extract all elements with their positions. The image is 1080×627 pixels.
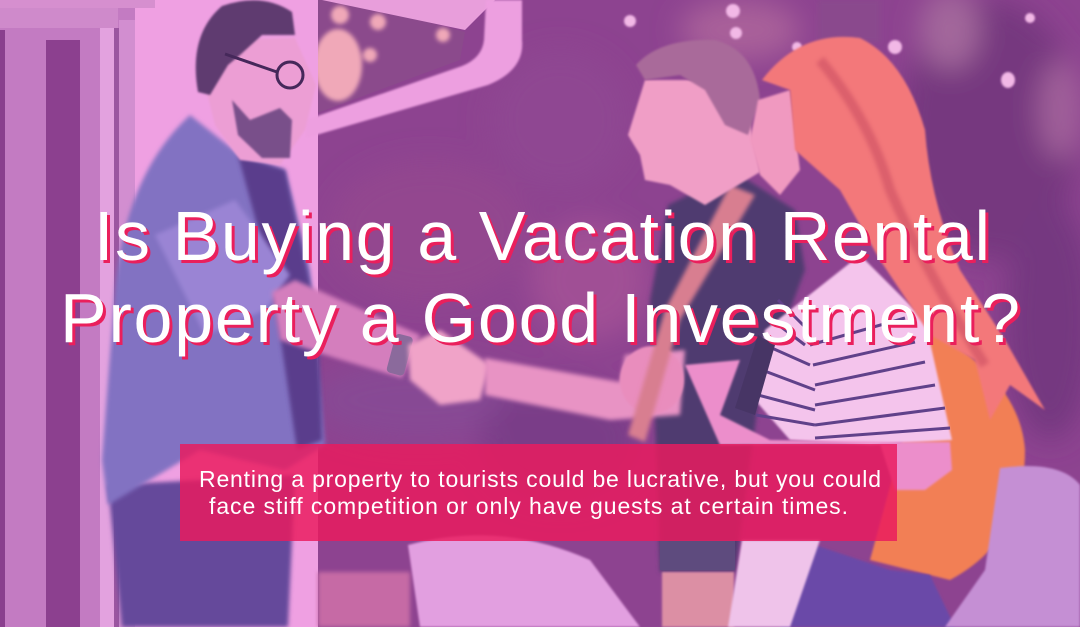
subtitle text — [199, 466, 881, 519]
arm — [272, 280, 420, 378]
furry rugs — [408, 466, 1080, 627]
backpack strap — [628, 185, 755, 442]
handshake — [408, 330, 490, 405]
subtitle text: face stiff competition or only have guests at certain times. — [209, 493, 848, 519]
subtitle panel — [180, 444, 897, 541]
young man right — [485, 40, 805, 627]
watch — [386, 333, 414, 376]
title shadow: Is Buying a Vacation Rental — [97, 200, 993, 278]
bokeh lights behind the gutter — [308, 0, 465, 115]
trousers — [662, 572, 734, 627]
neck and face — [205, 38, 316, 165]
man left: portrait with denim shirt — [102, 0, 420, 627]
deck at the bottom — [318, 572, 410, 627]
title shadow: Property a Good Investment? — [63, 282, 1023, 360]
glasses — [225, 54, 303, 88]
neck and face — [628, 80, 760, 205]
subtitle text: Renting a property to tourists could be lucrative, but you could — [199, 466, 881, 492]
face side — [750, 90, 800, 195]
backpack — [870, 330, 1025, 580]
sleeve — [155, 200, 290, 335]
woman with red hair and orange backpack — [685, 37, 1045, 627]
gutter and downpipe — [306, 0, 522, 138]
arm: elbow and hand — [685, 360, 952, 490]
beard — [232, 100, 292, 158]
knotted sleeve — [728, 540, 820, 627]
title shadow — [63, 200, 1023, 360]
arm — [485, 350, 685, 420]
shirt — [650, 172, 805, 572]
hair — [196, 0, 295, 95]
striped top — [755, 255, 952, 445]
legs — [108, 475, 295, 627]
hair — [636, 40, 760, 135]
jeans — [780, 540, 955, 627]
tree trunk — [818, 0, 880, 42]
title line 2: Property a Good Investment? — [60, 279, 1020, 357]
title line 1: Is Buying a Vacation Rental — [94, 197, 990, 275]
red hair — [762, 37, 1045, 420]
dark strap — [735, 335, 775, 415]
title — [60, 197, 1023, 360]
panel background — [180, 444, 897, 541]
shirt — [102, 115, 325, 505]
house wall and door — [0, 0, 318, 627]
string light bulbs — [624, 4, 1035, 88]
hand on strap — [620, 346, 684, 414]
